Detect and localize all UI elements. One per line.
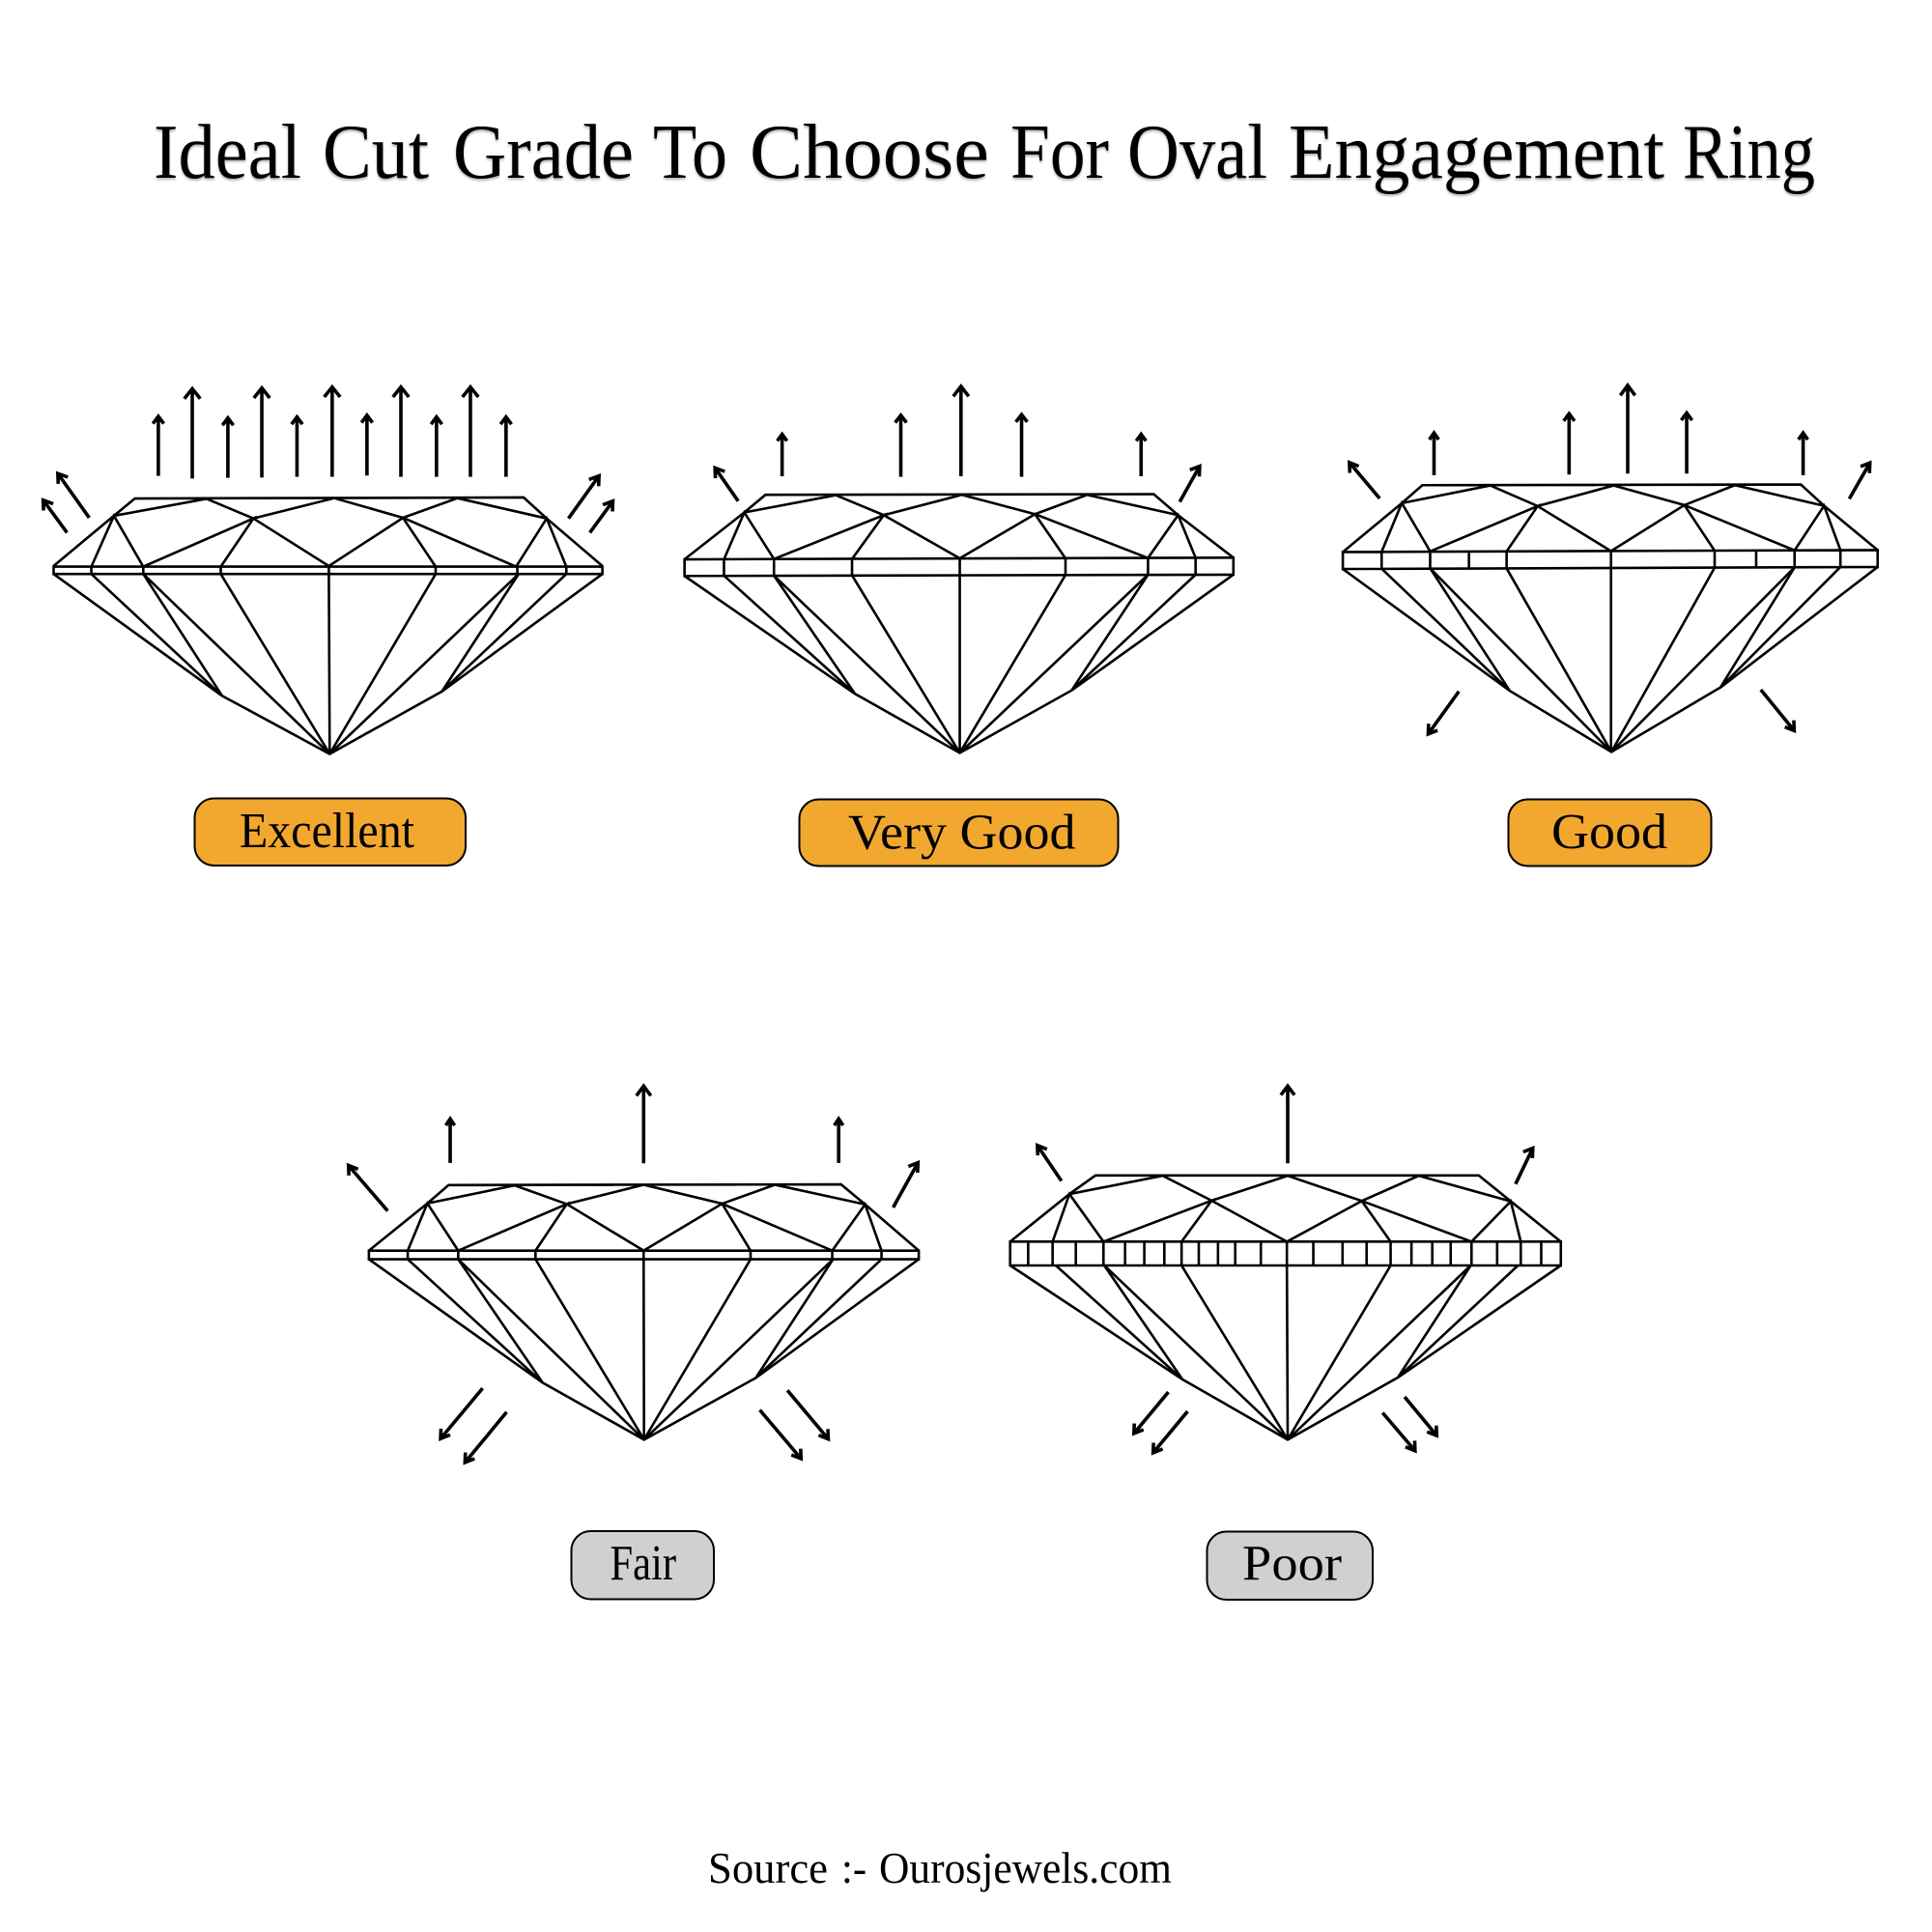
- pavilion facets: [1343, 567, 1878, 752]
- label: Good: [1509, 800, 1712, 866]
- title: Ideal: [154, 110, 301, 195]
- diamond: Good: [1343, 385, 1878, 752]
- girdle: [1010, 1241, 1561, 1265]
- label: Fair: Fair: [611, 1536, 676, 1591]
- source note: :-: [841, 1843, 867, 1892]
- title: For: [1010, 110, 1109, 195]
- girdle: [1343, 550, 1878, 569]
- light arrows: [43, 387, 612, 532]
- title: To: [653, 110, 727, 195]
- title: Cut: [323, 110, 429, 195]
- pavilion facets: [685, 575, 1234, 753]
- light arrows: [715, 386, 1200, 501]
- light arrows: [1350, 385, 1870, 734]
- diamond: Poor: [1010, 1086, 1561, 1453]
- girdle: [685, 557, 1234, 576]
- source note: [708, 1843, 1172, 1892]
- title: Engagement: [1289, 110, 1664, 195]
- crown facets: [54, 497, 603, 567]
- title: Grade: [453, 110, 634, 195]
- light arrows: [1037, 1086, 1533, 1453]
- title: Ring: [1683, 110, 1815, 195]
- title: Choose: [750, 110, 989, 195]
- title: [154, 110, 1815, 195]
- girdle: [54, 567, 603, 574]
- label: Fair: [572, 1531, 714, 1600]
- label: Excellent: [195, 798, 466, 866]
- diamond: Very Good: [685, 386, 1234, 753]
- diamond: Excellent: [43, 387, 612, 753]
- label: Excellent: Excellent: [240, 804, 414, 859]
- label: Very Good: Very Good: [848, 806, 1076, 860]
- source note: Ourosjewels.com: [879, 1843, 1172, 1892]
- crown facets: [1343, 485, 1878, 552]
- girdle: [369, 1251, 919, 1260]
- label: Poor: Poor: [1242, 1536, 1342, 1592]
- light arrows: [349, 1086, 918, 1463]
- pavilion facets: [1010, 1265, 1561, 1439]
- label: Very Good: [800, 800, 1119, 866]
- source note: Source: [708, 1843, 828, 1892]
- crown facets: [1010, 1176, 1561, 1241]
- crown facets: [369, 1184, 919, 1251]
- label: Good: Good: [1551, 805, 1667, 860]
- diamond: Fair: [349, 1086, 919, 1463]
- title: Oval: [1127, 110, 1267, 195]
- pavilion facets: [54, 574, 603, 753]
- pavilion facets: [369, 1260, 919, 1439]
- label: Poor: [1208, 1532, 1373, 1600]
- crown facets: [685, 495, 1234, 559]
